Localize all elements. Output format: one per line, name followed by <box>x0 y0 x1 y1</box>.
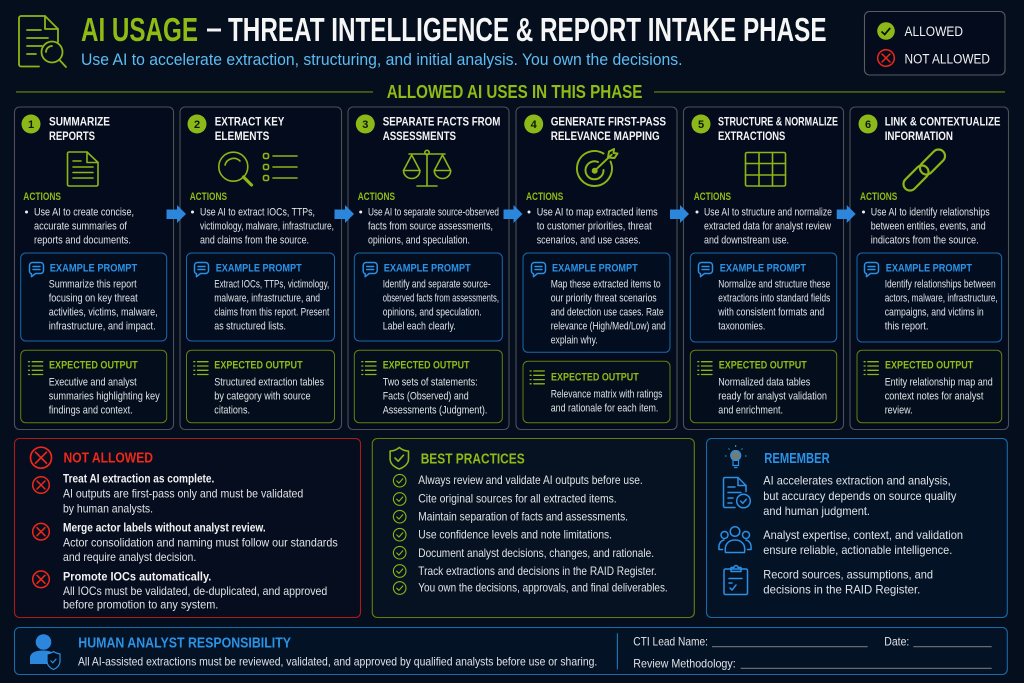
icon: not allowed cross <box>878 50 894 66</box>
expected output: Assessments (Judgment). <box>383 405 487 417</box>
checklist <box>393 473 668 595</box>
panel: card 2 extract key elements <box>180 107 342 430</box>
panel: not allowed <box>14 438 360 618</box>
note 1 <box>724 474 956 518</box>
sign-off fields <box>633 635 992 671</box>
legend label not allowed: NOT ALLOWED <box>904 51 990 66</box>
example prompt: activities, victims, malware, <box>49 306 158 318</box>
rule 1: AI outputs are first-pass only and must be validated <box>63 486 303 500</box>
sign-off fields: Review Methodology: <box>633 657 736 671</box>
example prompt: Summarize this report <box>49 278 137 290</box>
actions: ACTIONS <box>526 191 564 203</box>
expected output: review. <box>885 405 913 417</box>
example prompt: observed facts from assessments, <box>383 292 499 304</box>
example prompt: EXAMPLE PROMPT <box>886 263 972 275</box>
expected output <box>690 350 837 423</box>
actions: ACTIONS <box>358 191 395 203</box>
example prompt <box>857 253 1002 342</box>
card title: GENERATE FIRST-PASS <box>551 114 666 128</box>
title continuation: THREAT INTELLIGENCE & REPORT INTAKE PHASE <box>228 11 826 48</box>
example prompt <box>523 253 670 352</box>
subtitle: Use AI to accelerate extraction, structuring, and initial analysis. You own the decisions. <box>81 50 682 69</box>
actions: victimology, malware, infrastructure, <box>200 220 334 232</box>
card title: ELEMENTS <box>215 129 269 143</box>
example prompt: Identify and separate source- <box>383 278 491 290</box>
arrow: step 3 to 4 <box>504 205 522 223</box>
legend <box>864 12 1005 75</box>
actions: Use AI to separate source-observed <box>368 206 499 218</box>
step number 3: 3 <box>362 119 368 131</box>
example prompt: EXAMPLE PROMPT <box>50 263 137 275</box>
actions: Use AI to map extracted items <box>537 206 658 218</box>
icon: magnifier and list <box>219 152 297 185</box>
expected output: EXPECTED OUTPUT <box>214 359 303 371</box>
icon: allowed check <box>877 22 895 40</box>
example prompt: and detection use cases. Rate <box>551 306 664 318</box>
expected output: and rationale for each item. <box>551 403 658 415</box>
example prompt: EXAMPLE PROMPT <box>720 263 806 275</box>
heading: REMEMBER <box>764 451 830 467</box>
actions: Use AI to structure and normalize <box>704 206 832 218</box>
actions <box>694 191 832 246</box>
expected output: and enrichment. <box>718 405 783 417</box>
note 2: Analyst expertise, context, and validation <box>763 528 963 542</box>
expected output: EXPECTED OUTPUT <box>383 359 469 371</box>
checklist: Always review and validate AI outputs before use. <box>418 473 643 487</box>
expected output <box>523 361 670 423</box>
actions: Use AI to extract IOCs, TTPs, <box>200 206 315 218</box>
legend label allowed: ALLOWED <box>904 24 963 39</box>
step number 2 <box>188 114 206 134</box>
step number 6: 6 <box>865 119 871 131</box>
example prompt: opinions, and speculation. <box>383 306 482 318</box>
expected output: EXPECTED OUTPUT <box>49 359 138 371</box>
rule 1 <box>33 472 303 515</box>
rule 2: Actor consolidation and naming must follow our standards <box>63 535 338 549</box>
expected output: EXPECTED OUTPUT <box>885 359 973 371</box>
expected output: Executive and analyst <box>49 377 137 389</box>
expected output: context notes for analyst <box>885 391 984 403</box>
expected output: Entity relationship map and <box>885 377 993 389</box>
heading: HUMAN ANALYST RESPONSIBILITY <box>78 635 291 651</box>
expected output: summaries highlighting key <box>49 391 160 403</box>
icon: light bulb <box>725 445 746 468</box>
checklist: Cite original sources for all extracted items. <box>418 491 617 505</box>
step number 5: 5 <box>698 119 704 131</box>
heading: NOT ALLOWED <box>64 450 153 466</box>
panel: card 4 relevance mapping <box>516 107 677 430</box>
actions <box>526 191 658 246</box>
actions: Use AI to identify relationships <box>871 206 990 218</box>
note 3: Record sources, assumptions, and <box>763 567 933 581</box>
actions: to customer priorities, threat <box>537 220 652 232</box>
example prompt: our priority threat scenarios <box>551 292 657 304</box>
note 2: ensure reliable, actionable intelligence. <box>763 543 952 557</box>
card title: STRUCTURE & NORMALIZE <box>718 114 838 128</box>
rule 1: Treat AI extraction as complete. <box>63 472 214 486</box>
expected output: findings and context. <box>49 405 133 417</box>
note 3: decisions in the RAID Register. <box>763 583 920 597</box>
note 1: AI accelerates extraction and analysis, <box>763 474 951 488</box>
example prompt: malware, infrastructure, and <box>214 292 320 304</box>
example prompt <box>690 253 837 342</box>
example prompt: campaigns, and victims in <box>885 306 984 318</box>
section heading: ALLOWED AI USES IN THIS PHASE <box>387 81 642 102</box>
panel: card 5 structure and normalize <box>684 107 844 430</box>
card title <box>718 114 838 143</box>
note 1: but accuracy depends on source quality <box>763 489 956 503</box>
expected output <box>21 350 167 423</box>
card title <box>383 114 500 143</box>
expected output: EXPECTED OUTPUT <box>551 371 639 383</box>
example prompt <box>21 253 167 341</box>
actions: opinions, and speculation. <box>368 234 470 246</box>
expected output: Structured extraction tables <box>214 377 324 389</box>
rule 1: by human analysts. <box>63 501 153 515</box>
icon: table grid <box>746 152 786 186</box>
checklist: Use confidence levels and note limitations. <box>418 528 612 542</box>
statement: All AI-assisted extractions must be reviewed, validated, and approved by qualified analysts before use or sharing. <box>78 655 597 669</box>
expected output: Normalized data tables <box>718 377 811 389</box>
card title: SEPARATE FACTS FROM <box>383 114 500 128</box>
arrow: step 1 to 2 <box>166 205 186 223</box>
icon: analyst with shield <box>30 634 60 670</box>
icon: large cross <box>30 447 52 468</box>
card title <box>551 114 666 143</box>
card title: RELEVANCE MAPPING <box>551 129 660 143</box>
actions: ACTIONS <box>860 191 898 203</box>
card title: REPORTS <box>49 129 95 143</box>
actions: ACTIONS <box>190 191 227 203</box>
icon: document <box>68 152 98 186</box>
example prompt: Normalize and structure these <box>718 278 830 290</box>
example prompt: extractions into standard fields <box>718 292 831 304</box>
actions: indicators from the source. <box>871 234 979 246</box>
icon: document with magnifier <box>19 16 66 67</box>
checklist: Track extractions and decisions in the RAID Register. <box>418 564 657 578</box>
actions: ACTIONS <box>23 191 61 203</box>
example prompt: EXAMPLE PROMPT <box>216 263 302 275</box>
step number 2: 2 <box>194 119 200 131</box>
checklist: Document analyst decisions, changes, and rationale. <box>418 546 654 560</box>
step number 4: 4 <box>531 119 538 131</box>
expected output: Two sets of statements: <box>383 377 478 389</box>
note 1: and human judgment. <box>763 504 870 518</box>
step number 3 <box>356 114 375 134</box>
example prompt: as structured lists. <box>214 320 286 332</box>
card title: INFORMATION <box>885 129 953 143</box>
panel: best practices <box>372 438 694 618</box>
icon: target with arrow <box>577 149 618 186</box>
actions: ACTIONS <box>694 191 731 203</box>
expected output: Relevance matrix with ratings <box>551 389 663 401</box>
example prompt <box>186 253 334 341</box>
panel: remember <box>706 438 1007 618</box>
example prompt: Label each clearly. <box>383 320 456 332</box>
card title <box>49 114 110 143</box>
actions <box>358 191 499 246</box>
actions <box>190 191 334 246</box>
step number 4 <box>524 114 543 134</box>
panel: card 6 link and contextualize <box>850 107 1008 430</box>
actions: and downstream use. <box>704 234 789 246</box>
arrow: step 2 to 3 <box>334 205 354 223</box>
step number 1: 1 <box>28 119 34 131</box>
example prompt: explain why. <box>551 334 598 346</box>
rule 3: Promote IOCs automatically. <box>63 570 211 584</box>
sign-off fields: CTI Lead Name: <box>633 635 708 649</box>
card title: EXTRACT KEY <box>215 114 285 128</box>
expected output: Facts (Observed) and <box>383 391 469 403</box>
actions: between entities, events, and <box>871 220 986 232</box>
actions: Use AI to create concise, <box>34 206 134 218</box>
card title <box>885 114 1000 143</box>
sign-off fields: Date: <box>884 635 909 649</box>
step number 6 <box>858 114 878 134</box>
icon: scales <box>404 150 451 186</box>
actions: reports and documents. <box>34 234 131 246</box>
step number 1 <box>22 114 40 134</box>
icon: chain link <box>901 147 948 193</box>
card title: ASSESSMENTS <box>383 129 456 143</box>
note 3 <box>724 566 933 597</box>
expected output: ready for analyst validation <box>718 391 827 403</box>
example prompt: EXAMPLE PROMPT <box>552 263 638 275</box>
title: AI USAGE <box>81 11 198 48</box>
actions: extracted data for analyst review <box>704 220 832 232</box>
example prompt: focusing on key threat <box>49 292 138 304</box>
title dash <box>207 28 221 32</box>
example prompt: EXAMPLE PROMPT <box>384 263 471 275</box>
card title: SUMMARIZE <box>49 114 110 128</box>
actions: facts from source assessments, <box>368 220 493 232</box>
note 2 <box>719 527 963 557</box>
checklist: Maintain separation of facts and assessments. <box>418 509 628 523</box>
example prompt: claims from this report. Present <box>214 306 330 318</box>
actions: accurate summaries of <box>34 220 128 232</box>
example prompt: this report. <box>885 320 928 332</box>
heading: BEST PRACTICES <box>421 451 525 467</box>
arrow: step 4 to 5 <box>670 205 689 223</box>
example prompt <box>354 253 502 341</box>
actions: and claims from the source. <box>200 234 309 246</box>
panel: card 1 summarize reports <box>14 107 174 430</box>
rule 2: and require analyst decision. <box>63 550 196 564</box>
actions <box>23 191 134 246</box>
panel: human analyst responsibility <box>14 628 1007 674</box>
actions: scenarios, and use cases. <box>537 234 641 246</box>
card title <box>215 114 285 143</box>
actions <box>860 191 990 246</box>
expected output: EXPECTED OUTPUT <box>719 359 807 371</box>
arrow: step 5 to 6 <box>837 205 856 223</box>
checklist: You own the decisions, approvals, and final deliverables. <box>418 581 668 595</box>
expected output <box>857 350 1002 423</box>
example prompt: relevance (High/Med/Low) and <box>551 320 666 332</box>
expected output: citations. <box>214 405 250 417</box>
example prompt: infrastructure, and impact. <box>49 320 156 332</box>
rule 2: Merge actor labels without analyst review. <box>63 521 266 535</box>
rule 3: before promotion to any system. <box>63 598 218 612</box>
expected output <box>354 350 502 423</box>
step number 5 <box>692 114 710 134</box>
panel: card 3 separate facts <box>348 107 509 430</box>
example prompt: with consistent formats and <box>718 306 824 318</box>
example prompt: Map these extracted items to <box>551 278 661 290</box>
header <box>19 11 826 69</box>
expected output: by category with source <box>214 391 311 403</box>
icon: shield check <box>390 448 408 469</box>
rule 3: All IOCs must be validated, de-duplicated, and approved <box>63 584 327 598</box>
expected output <box>186 350 334 423</box>
example prompt: taxonomies. <box>718 320 765 332</box>
example prompt: Extract IOCs, TTPs, victimology, <box>214 278 329 290</box>
rule 3 <box>33 570 327 612</box>
rule 2 <box>33 521 338 564</box>
card title: EXTRACTIONS <box>718 129 785 143</box>
